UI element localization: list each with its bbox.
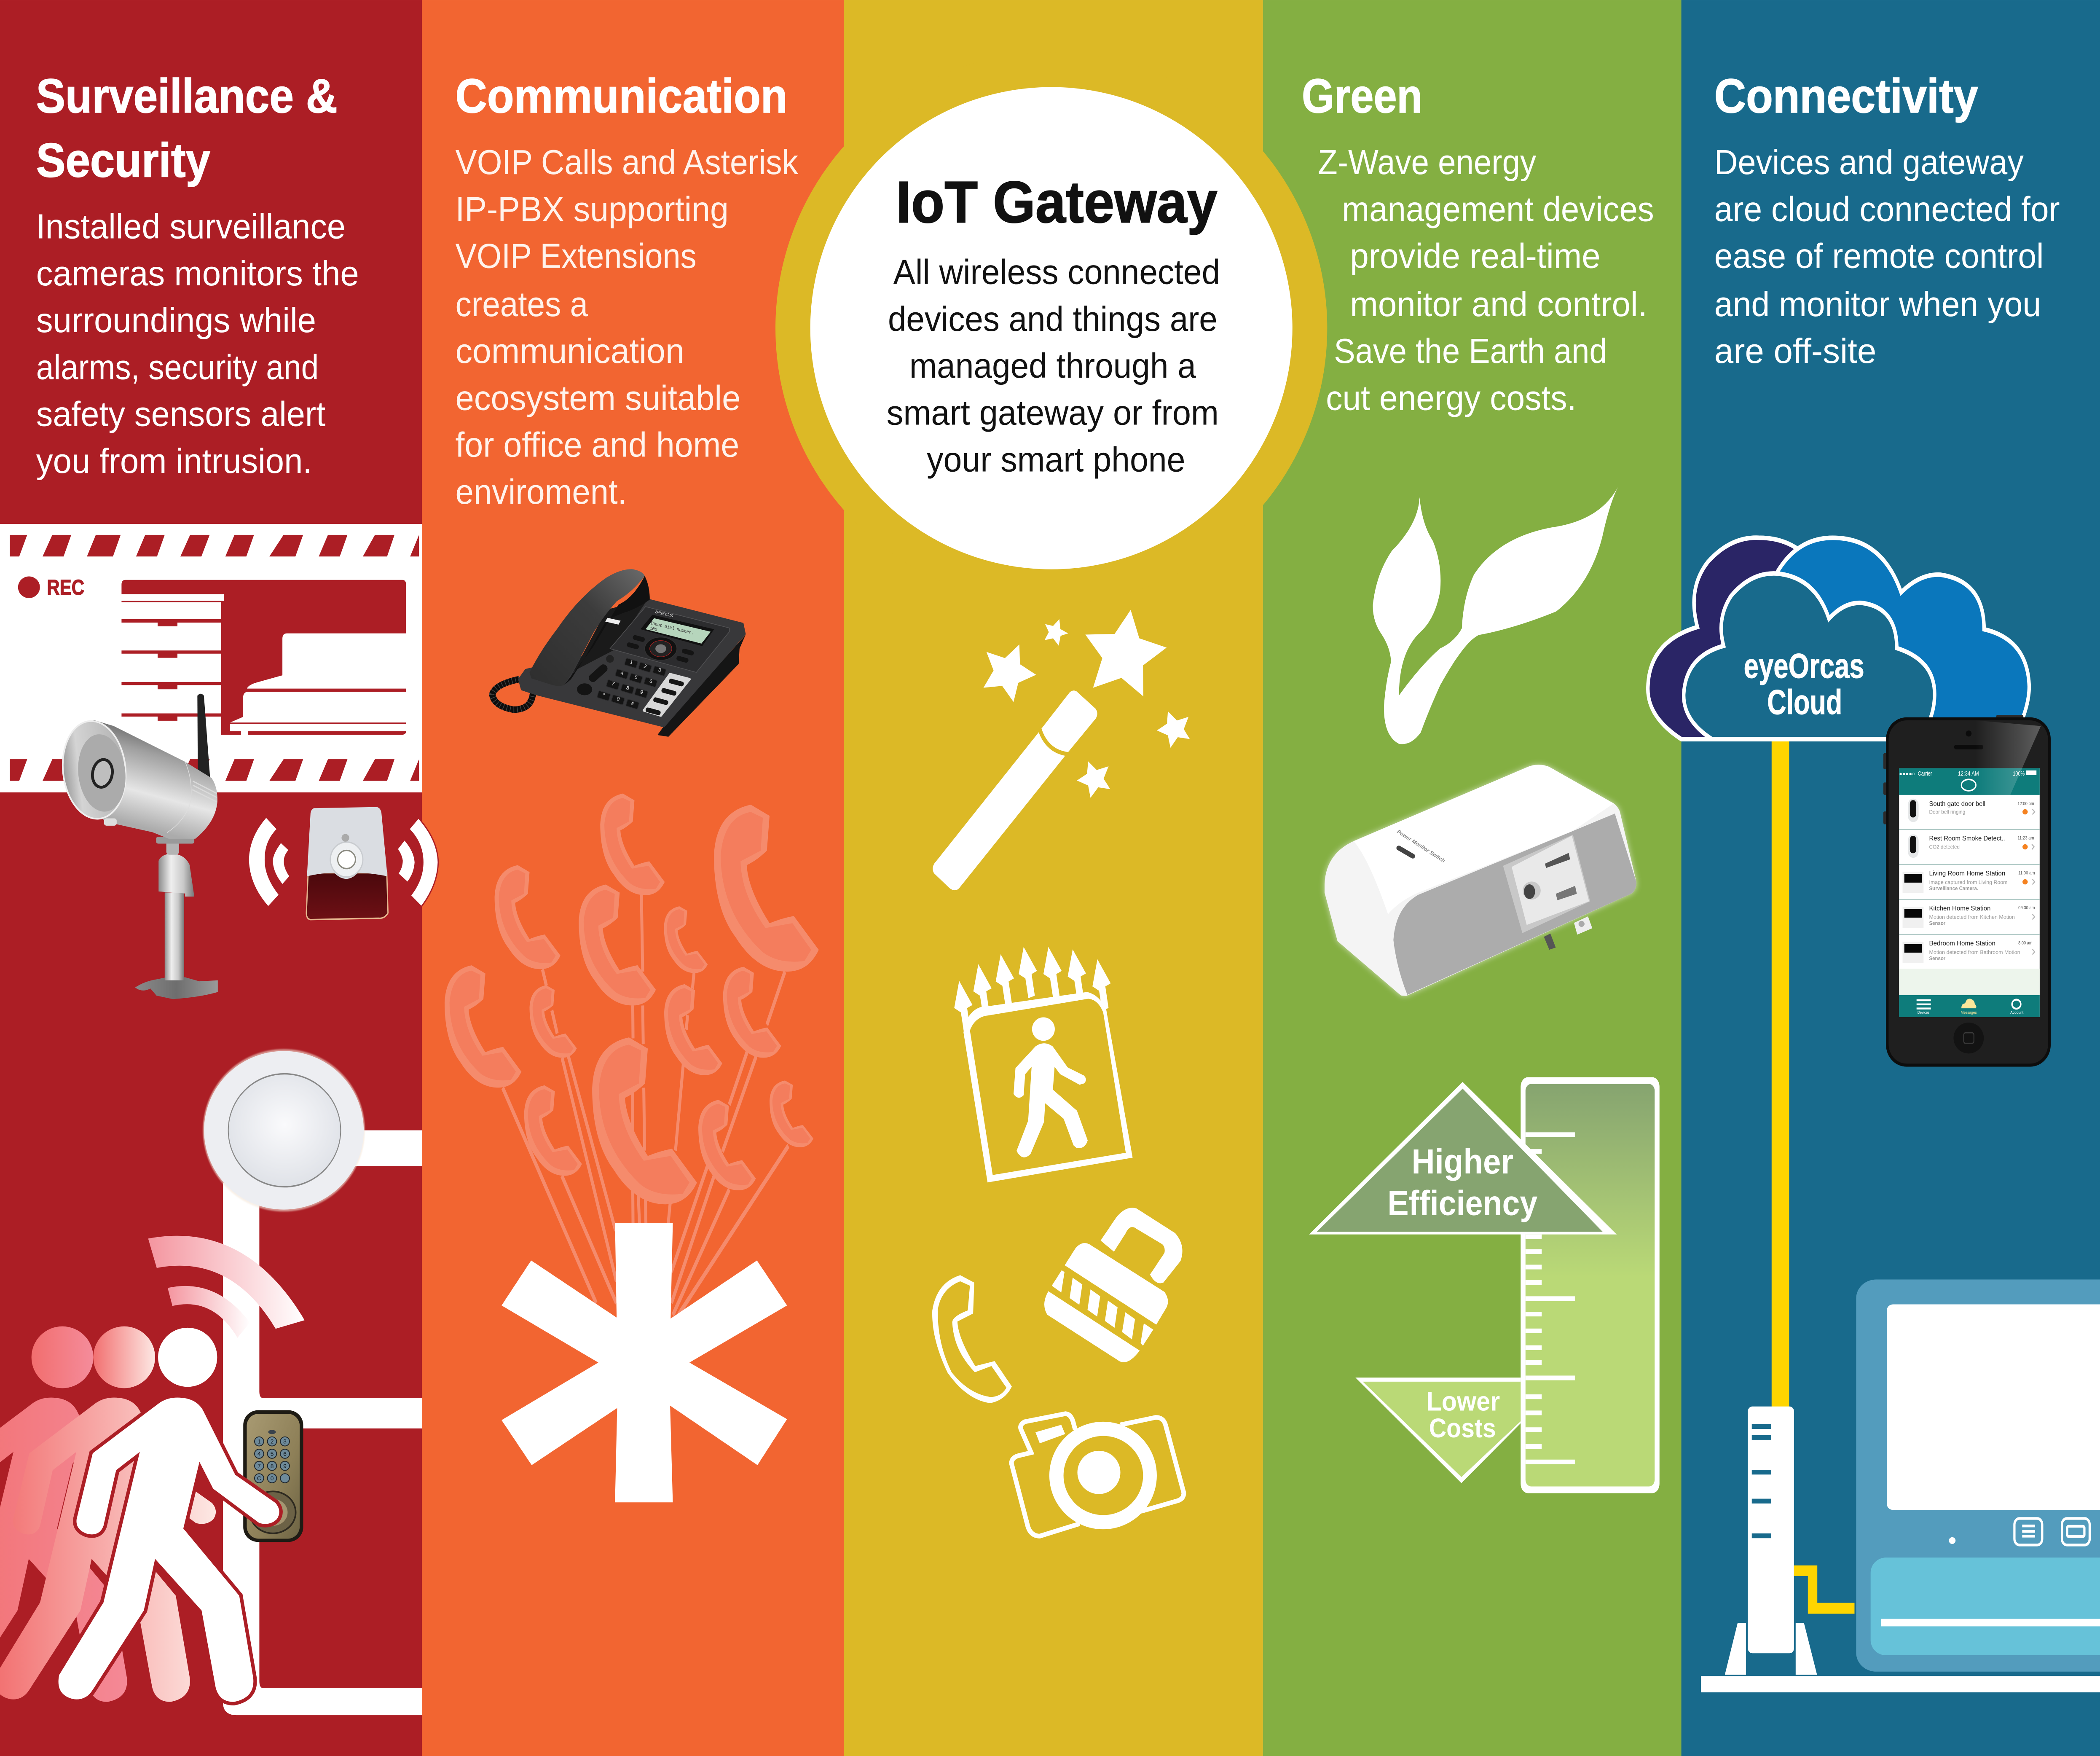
text block: green description (1318, 142, 1654, 417)
label: lower costs: Lower (1426, 1386, 1500, 1416)
icon: smartphone with app: Carrier (1918, 771, 1932, 777)
text block: green description: Save the Earth and (1334, 331, 1607, 371)
heading: IoT Gateway: IoT Gateway (896, 169, 1218, 235)
icon: smartphone with app: Account (2010, 1010, 2024, 1015)
illustration: keypad door lock and walking people: 9 (283, 1463, 287, 1469)
illustration: surveillance monitor banner (0, 524, 422, 792)
illustration: keypad door lock and walking people: 2 (271, 1438, 274, 1445)
icon: smartphone with app: Door bell ringing (1929, 809, 1965, 815)
icon: gateway yellow ring (775, 52, 1327, 604)
text block: gateway description: your smart phone (927, 440, 1185, 479)
icon: smartphone with app: Kitchen Home Station (1929, 905, 1990, 912)
icon: desk VoIP telephone: # (630, 700, 635, 706)
icon: camera (1011, 1414, 1184, 1536)
illustration: keypad door lock and walking people: 5 (271, 1450, 274, 1457)
icon: desk VoIP telephone: 2 (643, 663, 648, 670)
illustration: keypad door lock and walking people: 3 (283, 1438, 287, 1445)
icon: smartphone with app (1883, 715, 2051, 1067)
icon: smartphone with app: 11:23 am (2017, 835, 2034, 840)
label: lower costs (1426, 1386, 1500, 1443)
heading: green: Green (1302, 69, 1422, 123)
icon: smartphone with app: Motion detected from Bathroom Motion (1929, 949, 2020, 956)
text block: communication description: for office and home (455, 425, 739, 465)
heading: surveillance and security: Security (36, 134, 210, 188)
icon: smartphone with app: Sensor (1929, 955, 1945, 961)
icon: eyeOrcas cloud (1648, 538, 2029, 741)
icon: smartphone with app: South gate door bell (1929, 800, 1985, 808)
illustration: keypad door lock and walking people (0, 1326, 303, 1702)
icon: desk VoIP telephone: 8 (625, 685, 630, 691)
text block: connectivity description: are cloud connected for (1714, 189, 2060, 228)
text block: communication description: enviroment. (455, 472, 627, 511)
panel: green background (1263, 0, 1682, 1756)
text block: surveillance description: surroundings while (36, 301, 316, 340)
icon: desk VoIP telephone: 4 (620, 670, 625, 677)
illustration: keypad door lock and walking people: C (257, 1475, 261, 1482)
text block: connectivity description: are off-site (1714, 331, 1876, 371)
text block: gateway description (887, 252, 1220, 479)
text block: surveillance description: cameras monitors the (36, 254, 359, 293)
text block: surveillance description: you from intrusion. (36, 441, 312, 481)
text block: communication description: communication (455, 331, 684, 371)
illustration: wiring, motion sensor and signal (148, 1049, 422, 1715)
icon: smartphone with app: 09:30 am (2018, 905, 2035, 910)
icon: padlock (1044, 1208, 1183, 1362)
icon: desk VoIP telephone: 100 (649, 626, 658, 633)
icon: smartphone with app: Motion detected from Kitchen Motion (1929, 914, 2015, 920)
icon: smartphone with app: 12:00 pm (2017, 801, 2034, 806)
text block: gateway description: smart gateway or from (887, 393, 1219, 432)
text block: connectivity description: ease of remote control (1714, 236, 2044, 276)
text block: connectivity description (1714, 142, 2060, 371)
icon: wireless router and home station (1701, 1280, 2100, 1692)
illustration: asterisk with telephone balloons (445, 794, 819, 1502)
icon: desk VoIP telephone: iPECS (654, 610, 674, 619)
text block: green description: Z-Wave energy (1318, 142, 1537, 182)
icon: smartphone with app: Image captured from Living Room (1929, 879, 2007, 885)
heading: surveillance and security (36, 69, 338, 188)
icon: smart power plug: Power Monitor Switch (1396, 828, 1446, 864)
icon: desk VoIP telephone: 7 (611, 681, 615, 687)
icon: motion detection sign (954, 947, 1133, 1182)
text block: communication description: ecosystem suitable (455, 378, 740, 417)
label: higher efficiency: Higher (1412, 1142, 1513, 1181)
text block: surveillance description: alarms, security and (36, 347, 319, 387)
icon: smartphone with app: Bedroom Home Station (1929, 940, 1995, 947)
illustration: keypad door lock and walking people: 7 (257, 1463, 261, 1469)
illustration: keypad door lock and walking people: 1 (257, 1438, 261, 1445)
text block: green description: cut energy costs. (1326, 378, 1576, 417)
icon: smartphone with app: Living Room Home Station (1929, 870, 2005, 877)
heading: surveillance and security: Surveillance & (36, 69, 338, 123)
icon: smartphone with app: Rest Room Smoke Detect.. (1929, 835, 2005, 842)
label: eyeOrcas Cloud: eyeOrcas (1744, 646, 1864, 685)
label: lower costs: Costs (1429, 1413, 1496, 1443)
illustration: keypad door lock and walking people: 8 (271, 1463, 274, 1469)
arrow: yellow cloud to router cable (1772, 734, 1789, 1417)
panel: surveillance background (0, 0, 422, 1756)
icon: sprout leaves (1373, 487, 1618, 744)
illustration: keypad door lock and walking people: 0 (271, 1475, 274, 1482)
icon: smartphone with app: 11:00 am (2018, 870, 2035, 875)
heading: connectivity: Connectivity (1714, 69, 1978, 123)
text block: surveillance description: safety sensors alert (36, 395, 325, 434)
icon: desk VoIP telephone: 9 (639, 689, 644, 695)
panel: connectivity background (1682, 0, 2100, 1756)
text block: communication description: creates a (455, 285, 588, 324)
text block: green description: management devices (1342, 189, 1654, 228)
icon: smartphone with app: 8:00 am (2018, 940, 2033, 945)
icon: smartphone with app: ●●●●○ (1899, 771, 1915, 777)
text block: gateway description: devices and things are (888, 299, 1218, 338)
text block: communication description: IP-PBX supporting (455, 189, 729, 228)
icon: smart power plug (1325, 765, 1636, 996)
icon: smartphone with app: Messages (1961, 1010, 1977, 1015)
icon: smartphone with app: CO2 detected (1929, 844, 1960, 850)
illustration: keypad door lock and walking people: 4 (257, 1450, 261, 1457)
icon: siren alarm with signal waves (249, 807, 438, 920)
text block: communication description (455, 142, 799, 511)
panel: gateway background (844, 0, 1263, 1756)
label: higher efficiency (1387, 1142, 1537, 1222)
icon: smartphone with app: 100% (2013, 771, 2025, 777)
text block: green description: monitor and control. (1350, 285, 1647, 324)
text block: communication description: VOIP Extensions (455, 236, 697, 276)
text block: gateway description: managed through a (909, 346, 1196, 385)
heading: communication: Communication (455, 69, 788, 123)
label: REC indicator: REC (47, 575, 84, 599)
icon: desk VoIP telephone: 6 (649, 678, 653, 685)
icon: smartphone with app: 12:34 AM (1958, 771, 1979, 777)
icon: desk VoIP telephone: 5 (634, 674, 638, 681)
panel: communication background (422, 0, 845, 1756)
label: eyeOrcas Cloud: Cloud (1767, 682, 1842, 722)
icon: desk VoIP telephone: 3 (657, 667, 662, 673)
icon: desk VoIP telephone (492, 569, 746, 737)
icon: desk VoIP telephone: 1 (629, 659, 634, 666)
icon: desk VoIP telephone: 0 (616, 695, 621, 702)
text block: surveillance description: Installed surveillance (36, 207, 346, 246)
icon: phone handset outline (932, 1275, 1012, 1403)
icon: wireless security camera (58, 694, 218, 999)
chart: efficiency gauge (1309, 1077, 1660, 1493)
text block: green description: provide real-time (1350, 236, 1601, 276)
text block: connectivity description: and monitor when you (1714, 285, 2041, 324)
icon: smartphone with app: Devices (1918, 1010, 1930, 1015)
icon: smartphone with app: Surveillance Camera. (1929, 885, 1978, 891)
panel: gateway white circle (810, 87, 1293, 569)
text block: gateway description: All wireless connected (893, 252, 1220, 292)
text block: connectivity description: Devices and gateway (1714, 142, 2024, 182)
icon: desk VoIP telephone: Input dial number. (649, 621, 694, 636)
text block: communication description: VOIP Calls and Asterisk (455, 142, 799, 182)
text block: surveillance description (36, 207, 359, 481)
icon: desk VoIP telephone: * (602, 692, 606, 698)
icon: magic wand and stars (933, 610, 1190, 890)
illustration: keypad door lock and walking people: 6 (283, 1450, 287, 1457)
label: higher efficiency: Efficiency (1387, 1183, 1537, 1222)
icon: smartphone with app: Sensor (1929, 920, 1945, 926)
label: eyeOrcas Cloud (1744, 646, 1864, 722)
